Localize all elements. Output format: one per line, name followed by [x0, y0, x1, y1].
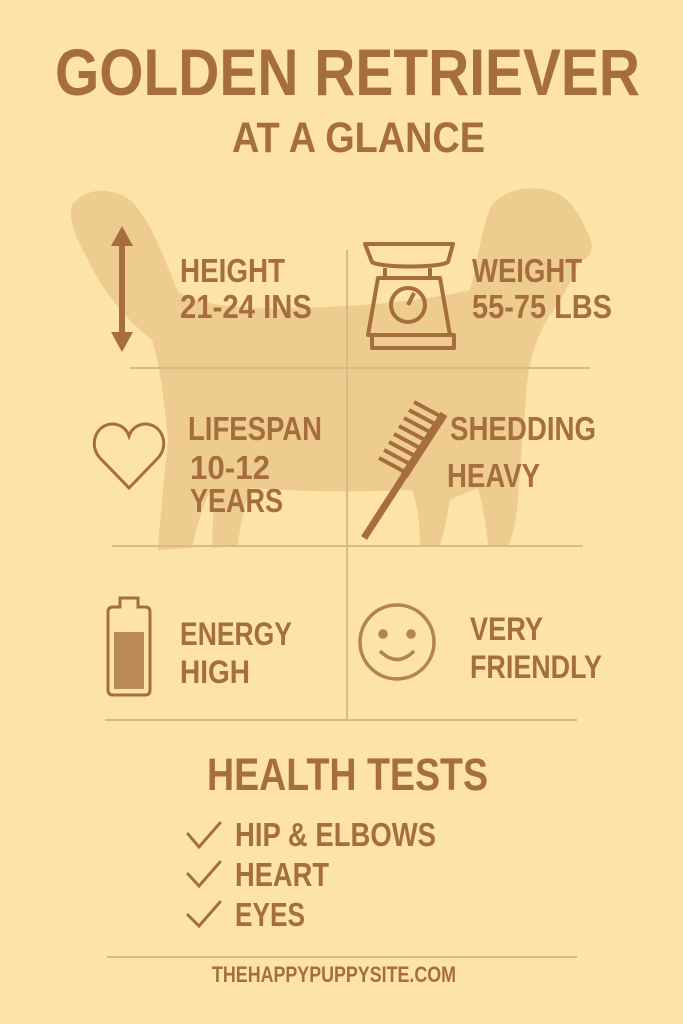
shedding text: SHEDDING: [450, 410, 596, 447]
lifespan text: [188, 410, 322, 519]
checklist: HIP & ELBOWS: [235, 816, 436, 853]
footer: THEHAPPYPUPPYSITE.COM: [212, 962, 456, 987]
shedding text: HEAVY: [447, 457, 540, 494]
icon: scale: [365, 244, 454, 348]
health tests heading: HEALTH TESTS: [207, 749, 488, 800]
energy text: ENERGY: [180, 616, 292, 652]
lifespan text: YEARS: [190, 482, 283, 519]
friendly text: [470, 611, 602, 685]
friendly text: FRIENDLY: [470, 649, 602, 685]
checklist: EYES: [235, 896, 305, 933]
height text: [180, 252, 312, 325]
energy text: HIGH: [180, 654, 250, 690]
icon: height arrow: [111, 226, 133, 352]
shedding text: [447, 410, 596, 494]
checklist: [188, 816, 436, 933]
friendly text: VERY: [470, 611, 543, 647]
lifespan text: LIFESPAN: [188, 410, 322, 447]
height text: HEIGHT: [180, 252, 285, 289]
dog silhouette: [71, 188, 592, 550]
grid lines: [105, 250, 590, 957]
energy text: [180, 616, 292, 690]
height text: 21-24 INS: [180, 288, 312, 325]
icon: smiley: [360, 605, 434, 679]
checklist: HEART: [235, 856, 329, 893]
icon: comb: [364, 402, 444, 538]
weight text: [472, 252, 612, 325]
icon: heart: [94, 424, 164, 488]
weight text: 55-75 LBS: [472, 288, 612, 325]
lifespan text: 10-12: [190, 449, 270, 486]
icon: battery: [108, 598, 150, 695]
subtitle: AT A GLANCE: [232, 114, 485, 162]
weight text: WEIGHT: [472, 252, 582, 289]
